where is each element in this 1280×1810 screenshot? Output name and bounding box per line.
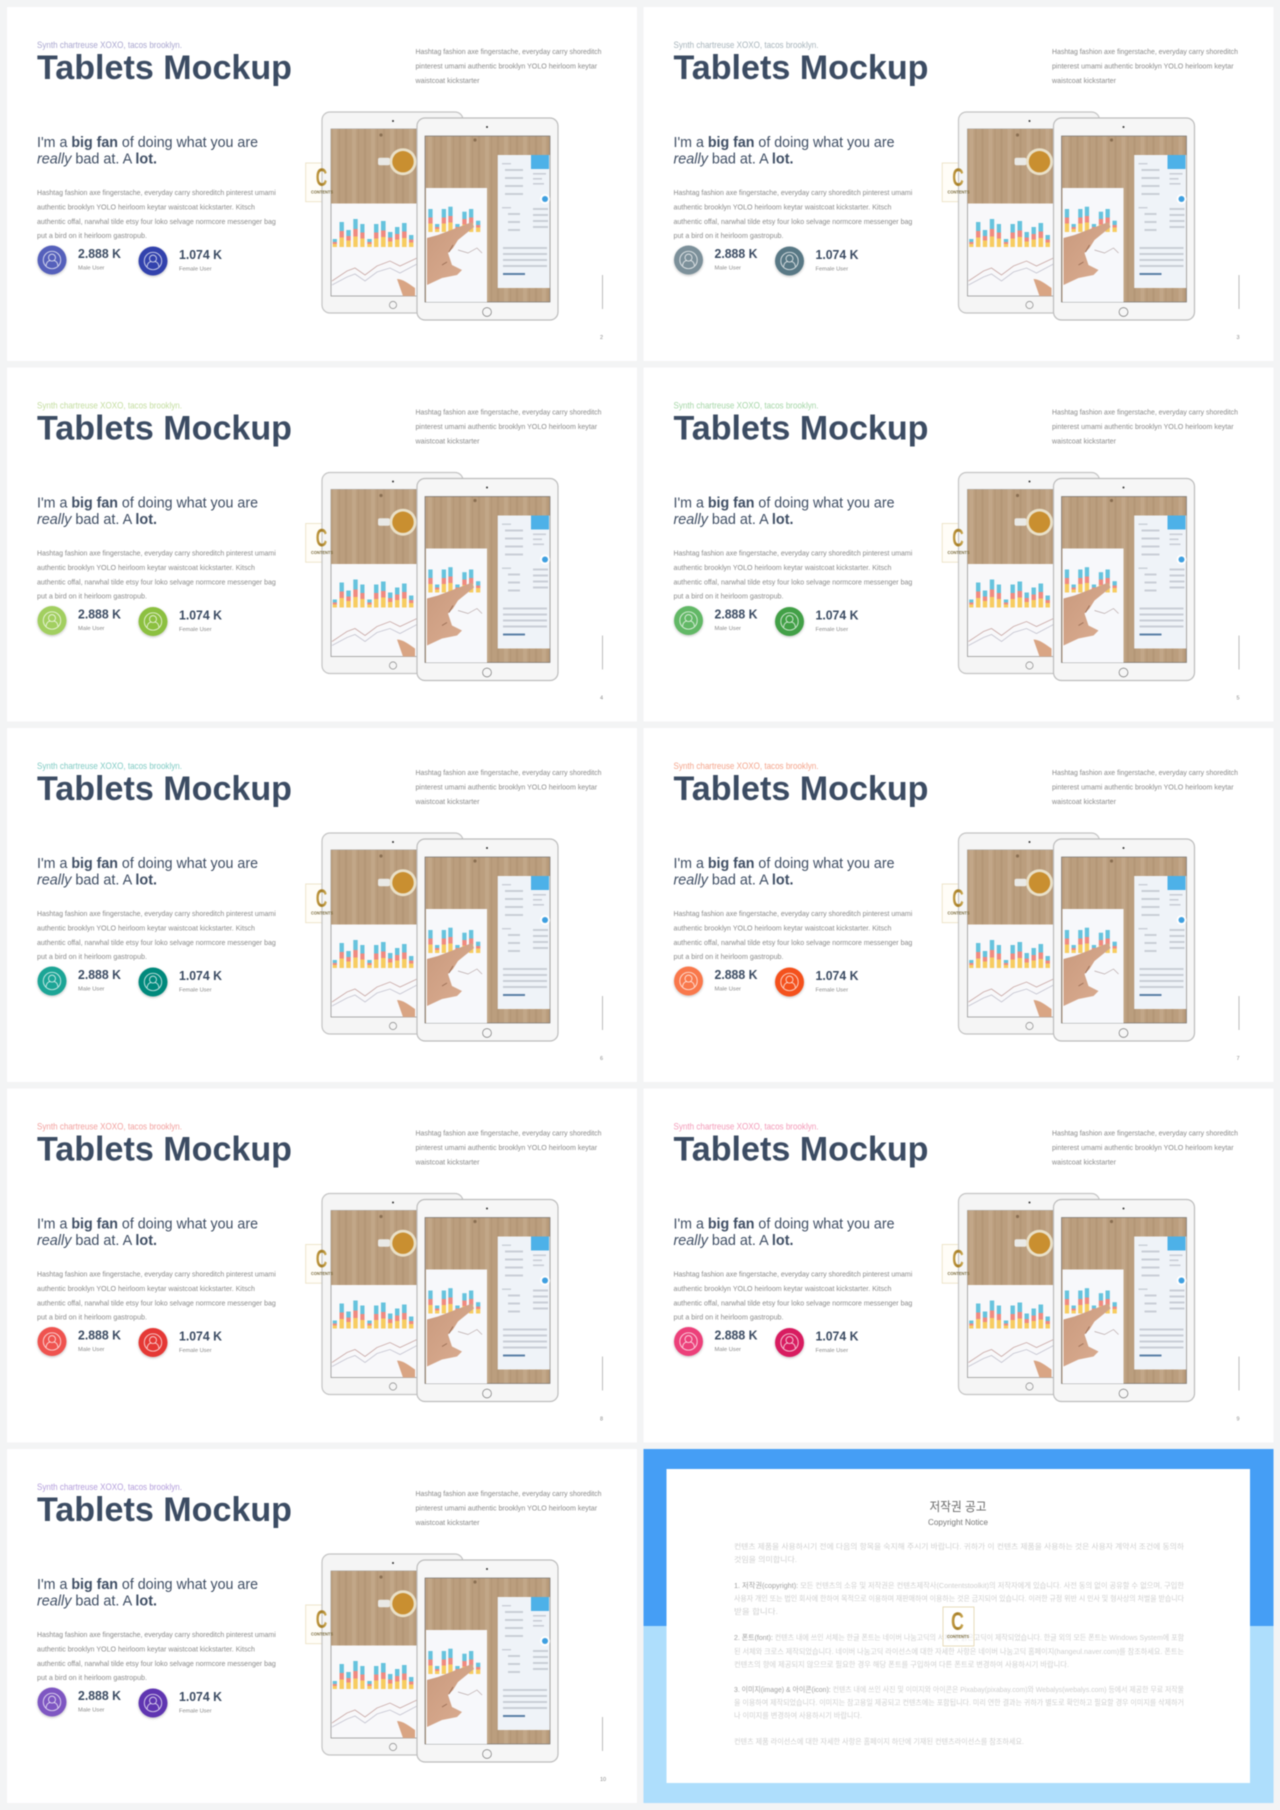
body text: authentic offal, narwhal tilde etsy four loko selvage normcore messenger bag: [37, 938, 276, 947]
stat: female user: [138, 1328, 223, 1357]
tablets mockup: [322, 472, 558, 680]
description: waistcoat kickstarter: [1051, 436, 1116, 446]
body text: authentic offal, narwhal tilde etsy four loko selvage normcore messenger bag: [37, 578, 276, 586]
clause 1: [734, 1581, 1184, 1616]
body text: [674, 188, 913, 240]
heading: I'm a big fan of doing what you are: [37, 856, 258, 872]
description: waistcoat kickstarter: [415, 76, 480, 85]
tablets mockup: [958, 833, 1194, 1041]
title: Tablets Mockup: [674, 410, 928, 448]
heading: I'm a big fan of doing what you are: [37, 1216, 258, 1232]
body text: Hashtag fashion axe fingerstache, everyday carry shoreditch pinterest umami: [37, 909, 276, 918]
heading: [674, 1216, 894, 1249]
description: waistcoat kickstarter: [415, 797, 480, 806]
description: Hashtag fashion axe fingerstache, everyday carry shoreditch: [416, 1128, 602, 1138]
watermark logo: C: [952, 1246, 964, 1274]
watermark logo: CONTENTS: [311, 910, 334, 916]
stat: male user: [674, 246, 758, 274]
stat: male user: Male User: [714, 626, 741, 632]
subtitle: Synth chartreuse XOXO, tacos brooklyn.: [37, 1122, 182, 1132]
watermark logo: C: [316, 1246, 327, 1274]
description: Hashtag fashion axe fingerstache, everyday carry shoreditch: [1052, 1128, 1238, 1138]
body text: authentic offal, narwhal tilde etsy four loko selvage normcore messenger bag: [674, 217, 912, 226]
clause 3: 나 이미지를 변경하여 사용하시기 바랍니다.: [734, 1711, 862, 1720]
clause 3: [734, 1685, 1184, 1720]
body text: [37, 1270, 276, 1322]
description: waistcoat kickstarter: [415, 436, 480, 446]
subtitle: Synth chartreuse XOXO, tacos brooklyn.: [674, 1122, 818, 1132]
description: [415, 1128, 602, 1166]
subtitle: Synth chartreuse XOXO, tacos brooklyn.: [674, 400, 818, 412]
body text: authentic offal, narwhal tilde etsy four loko selvage normcore messenger bag: [37, 1298, 276, 1308]
heading: I'm a big fan of doing what you are: [37, 135, 258, 151]
title: Tablets Mockup: [37, 770, 292, 808]
stat: male user: Male User: [78, 1708, 105, 1714]
watermark frame: [306, 524, 336, 562]
body text: Hashtag fashion axe fingerstache, everyday carry shoreditch pinterest umami: [37, 548, 276, 558]
description: waistcoat kickstarter: [415, 1158, 480, 1166]
description: pinterest umami authentic brooklyn YOLO heirloom keytar: [1052, 1143, 1234, 1152]
description: [415, 47, 602, 85]
copyright intro: [734, 1542, 1184, 1564]
watermark frame: [942, 524, 972, 562]
heading: [37, 1216, 258, 1249]
stat: female user: Female User: [179, 627, 212, 633]
clause 3: 3. 이미지(image) & 아이콘(icon): 컨텐츠 내에 쓰인 사진 및 이미지와 아이콘은 Pixabay(pixabay.com)와 Webalys(webalys.com) 등에서 제공한 무료 저작물: [734, 1685, 1184, 1694]
page number: 8: [600, 1416, 603, 1422]
accent line: [602, 1717, 603, 1751]
stat: female user: Female User: [816, 1348, 848, 1354]
body text: Hashtag fashion axe fingerstache, everyday carry shoreditch pinterest umami: [674, 1270, 913, 1278]
description: [415, 408, 602, 446]
heading: [37, 1577, 258, 1610]
stat: male user: 2.888 K: [714, 606, 758, 622]
description: waistcoat kickstarter: [415, 1518, 480, 1527]
watermark frame: [306, 1244, 336, 1283]
heading: [37, 135, 258, 168]
title: Tablets Mockup: [674, 49, 928, 87]
slide 7: [7, 1088, 637, 1442]
description: Hashtag fashion axe fingerstache, everyday carry shoreditch: [1052, 408, 1238, 416]
stat: male user: [38, 246, 122, 274]
watermark logo: CONTENTS: [311, 550, 334, 556]
body text: authentic brooklyn YOLO heirloom keytar waistcoat kickstarter. Kitsch: [674, 1284, 892, 1293]
stat: female user: 1.074 K: [179, 247, 223, 262]
copyright intro: 것임을 의미합니다.: [734, 1555, 797, 1564]
accent line: [602, 996, 603, 1030]
stat: female user: 1.074 K: [816, 608, 859, 622]
accent line: [1238, 1356, 1240, 1390]
watermark logo: C: [316, 1606, 327, 1634]
stat: male user: 2.888 K: [714, 246, 758, 261]
description: [1051, 47, 1238, 85]
heading: I'm a big fan of doing what you are: [674, 856, 894, 872]
heading: [37, 496, 258, 528]
body text: put a bird on it heirloom gastropub.: [37, 231, 147, 240]
stat: female user: Female User: [816, 266, 848, 272]
description: pinterest umami authentic brooklyn YOLO heirloom keytar: [1052, 422, 1234, 431]
body text: Hashtag fashion axe fingerstache, everyday carry shoreditch pinterest umami: [37, 1630, 276, 1639]
body text: put a bird on it heirloom gastropub.: [674, 592, 784, 600]
clause 2: 2. 폰트(font): 컨텐츠 내에 쓰인 서체는 한글 폰트는 네이버 나눔고딕의 서체 및 맑은고딕이 제작되었습니다. 한글 외의 모든 폰트는 Windows System에 포함: [734, 1633, 1184, 1642]
description: pinterest umami authentic brooklyn YOLO heirloom keytar: [416, 1143, 598, 1152]
clause 2: 컨텐츠의 향에 제공되지 않으므로 필요한 경우 해당 폰트를 구입하여 다른 폰트로 변경하여 사용하시기 바랍니다.: [734, 1660, 1069, 1669]
watermark logo: C: [952, 524, 964, 552]
heading: I'm a big fan of doing what you are: [37, 1577, 258, 1593]
clause 1: 사용자 개인 또는 법인 회사에 한하여 목적으로 이용하며 재판매하여 이용하는 것은 금지되어 있습니다. 이러한 규정 위반 시 민사 및 형사상의 처벌을 받습니다: [734, 1594, 1184, 1603]
clause 2: [734, 1633, 1184, 1669]
title: Tablets Mockup: [674, 1130, 928, 1168]
clause 1: 받을 합니다.: [734, 1607, 778, 1616]
body text: authentic brooklyn YOLO heirloom keytar waistcoat kickstarter. Kitsch: [37, 924, 255, 932]
heading: really bad at. A lot.: [674, 1233, 794, 1249]
heading: [674, 135, 894, 168]
stat: female user: [775, 968, 859, 996]
subtitle: Synth chartreuse XOXO, tacos brooklyn.: [37, 40, 182, 51]
watermark logo: C: [316, 524, 327, 552]
stat: male user: Male User: [714, 1347, 741, 1353]
body text: put a bird on it heirloom gastropub.: [674, 231, 784, 240]
watermark logo: C: [952, 885, 964, 913]
description: Hashtag fashion axe fingerstache, everyday carry shoreditch: [416, 768, 602, 777]
slide 1: [7, 7, 637, 361]
description: [1051, 768, 1238, 806]
heading: [674, 856, 894, 888]
stat: female user: Female User: [179, 266, 212, 272]
watermark logo: CONTENTS: [948, 550, 970, 556]
watermark: [943, 1607, 974, 1646]
heading: [37, 856, 258, 888]
stat: male user: 2.888 K: [78, 606, 122, 622]
body text: authentic offal, narwhal tilde etsy four loko selvage normcore messenger bag: [37, 217, 276, 226]
description: Hashtag fashion axe fingerstache, everyday carry shoreditch: [416, 408, 602, 416]
slide 5: [7, 728, 637, 1082]
body text: put a bird on it heirloom gastropub.: [674, 1312, 784, 1322]
stat: female user: [138, 1688, 223, 1718]
stat: female user: 1.074 K: [179, 1689, 223, 1704]
tablets mockup: [322, 112, 558, 320]
description: waistcoat kickstarter: [1051, 1158, 1116, 1166]
stat: female user: [138, 968, 223, 996]
description: waistcoat kickstarter: [1051, 797, 1116, 806]
description: [1051, 1128, 1238, 1166]
description: pinterest umami authentic brooklyn YOLO heirloom keytar: [416, 782, 598, 792]
body text: authentic offal, narwhal tilde etsy four loko selvage normcore messenger bag: [37, 1659, 276, 1668]
heading: [674, 496, 894, 528]
body text: [674, 548, 913, 600]
heading: really bad at. A lot.: [37, 1233, 157, 1249]
tablets mockup: [958, 112, 1194, 320]
watermark logo: C: [952, 164, 964, 192]
stat: female user: 1.074 K: [179, 608, 223, 622]
stat: female user: [775, 607, 859, 636]
watermark frame: [306, 884, 336, 923]
stat: male user: 2.888 K: [714, 967, 758, 982]
body text: put a bird on it heirloom gastropub.: [37, 1673, 147, 1682]
body text: authentic brooklyn YOLO heirloom keytar waistcoat kickstarter. Kitsch: [674, 202, 892, 212]
heading: I'm a big fan of doing what you are: [37, 496, 258, 512]
watermark logo: CONTENTS: [311, 1271, 334, 1277]
description: Hashtag fashion axe fingerstache, everyday carry shoreditch: [416, 47, 602, 56]
watermark logo: CONTENTS: [948, 190, 970, 196]
heading: I'm a big fan of doing what you are: [674, 1216, 894, 1232]
tablets mockup: [322, 833, 558, 1041]
tablets mockup: [322, 1554, 558, 1762]
title: Tablets Mockup: [37, 1491, 292, 1529]
body text: Hashtag fashion axe fingerstache, everyday carry shoreditch pinterest umami: [37, 1270, 276, 1278]
body text: authentic brooklyn YOLO heirloom keytar waistcoat kickstarter. Kitsch: [674, 924, 892, 932]
page number: 3: [1236, 335, 1240, 341]
body text: [37, 548, 276, 600]
body text: [37, 188, 276, 240]
description: pinterest umami authentic brooklyn YOLO heirloom keytar: [416, 422, 598, 431]
panel: copyright notice: [644, 1449, 1274, 1803]
body text: authentic offal, narwhal tilde etsy four loko selvage normcore messenger bag: [674, 938, 912, 947]
clause 1: 1. 저작권(copyright): 모든 컨텐츠의 소유 및 저작권은 컨텐츠제작사(Contentstoolkit)의 저작자에게 있습니다. 사전 동의 없이 공유할 수 없으며, 구입한: [734, 1581, 1184, 1590]
page number: 9: [1236, 1416, 1240, 1422]
body text: [674, 909, 913, 961]
watermark frame: [942, 1244, 972, 1283]
subtitle: Synth chartreuse XOXO, tacos brooklyn.: [674, 40, 818, 51]
heading: really bad at. A lot.: [674, 872, 794, 888]
tablets mockup: [958, 472, 1194, 680]
stat: male user: [674, 1327, 758, 1356]
stat: male user: Male User: [714, 266, 741, 272]
clause 3: 을 이용하여 제작되었습니다. 이미지는 참고용일 제공되고 컨텐츠에는 포함됩니다. 미리 연한 결과는 귀하가 별도로 확인하고 필요할 경우 이미지를 삭제하거: [734, 1698, 1184, 1707]
accent line: [1238, 636, 1240, 670]
watermark: C: [951, 1608, 964, 1636]
heading: I'm a big fan of doing what you are: [674, 135, 894, 151]
body text: Hashtag fashion axe fingerstache, everyday carry shoreditch pinterest umami: [37, 188, 276, 197]
body text: [37, 1630, 276, 1682]
body text: authentic offal, narwhal tilde etsy four loko selvage normcore messenger bag: [674, 578, 912, 586]
watermark logo: CONTENTS: [311, 1632, 334, 1638]
stat: female user: 1.074 K: [816, 247, 859, 262]
heading: really bad at. A lot.: [37, 872, 157, 888]
accent line: [602, 275, 603, 309]
page number: 4: [600, 696, 603, 702]
description: [1051, 408, 1238, 446]
stat: female user: 1.074 K: [179, 968, 223, 983]
body text: authentic brooklyn YOLO heirloom keytar waistcoat kickstarter. Kitsch: [37, 202, 255, 212]
description: pinterest umami authentic brooklyn YOLO heirloom keytar: [1052, 782, 1234, 792]
stat: female user: Female User: [816, 627, 848, 633]
watermark logo: CONTENTS: [948, 1271, 970, 1277]
body text: put a bird on it heirloom gastropub.: [37, 592, 147, 600]
title: Tablets Mockup: [37, 1130, 292, 1168]
stat: male user: Male User: [78, 1347, 105, 1353]
stat: male user: 2.888 K: [78, 967, 122, 982]
copyright heading: 저작권 공고: [930, 1500, 986, 1514]
tablets mockup: [958, 1194, 1194, 1402]
description: pinterest umami authentic brooklyn YOLO heirloom keytar: [1052, 62, 1234, 70]
stat: male user: Male User: [714, 986, 741, 992]
body text: put a bird on it heirloom gastropub.: [37, 1312, 147, 1322]
slide 6: [644, 728, 1274, 1082]
watermark frame: [942, 163, 972, 202]
body text: [674, 1270, 913, 1322]
stat: male user: 2.888 K: [78, 1688, 122, 1703]
body text: put a bird on it heirloom gastropub.: [37, 952, 147, 961]
closing line: 컨텐츠 제품 라이선스에 대한 자세한 사항은 홈페이지 하단에 기재된 컨텐츠라이선스를 참조하세요.: [734, 1737, 1024, 1746]
stat: female user: [775, 1328, 859, 1357]
subtitle: Synth chartreuse XOXO, tacos brooklyn.: [37, 400, 182, 412]
subtitle: Synth chartreuse XOXO, tacos brooklyn.: [674, 761, 818, 772]
heading: really bad at. A lot.: [674, 512, 794, 528]
slide 9: [7, 1449, 637, 1803]
stat: male user: [674, 606, 758, 635]
stat: female user: [138, 246, 223, 276]
copyright subheading: Copyright Notice: [928, 1517, 988, 1527]
body text: Hashtag fashion axe fingerstache, everyday carry shoreditch pinterest umami: [674, 548, 913, 558]
stat: male user: Male User: [78, 626, 105, 632]
body text: authentic brooklyn YOLO heirloom keytar waistcoat kickstarter. Kitsch: [37, 563, 255, 572]
stat: male user: [674, 966, 758, 996]
body text: authentic brooklyn YOLO heirloom keytar waistcoat kickstarter. Kitsch: [37, 1644, 255, 1654]
accent line: [1238, 275, 1240, 309]
page number: 10: [600, 1777, 606, 1783]
watermark logo: C: [316, 164, 327, 192]
stat: male user: Male User: [78, 986, 105, 992]
copyright intro: 컨텐츠 제품을 사용하시기 전에 다음의 항목을 숙지해 주시기 바랍니다. 귀하가 이 컨텐츠 제품을 사용하는 것은 사용자 계약서 조건에 동의하: [734, 1542, 1184, 1551]
watermark frame: [306, 163, 336, 202]
title: Tablets Mockup: [37, 49, 292, 87]
body text: authentic brooklyn YOLO heirloom keytar waistcoat kickstarter. Kitsch: [37, 1284, 255, 1293]
heading: really bad at. A lot.: [37, 512, 157, 528]
stat: female user: Female User: [179, 988, 212, 994]
description: waistcoat kickstarter: [1051, 76, 1116, 85]
stat: male user: [38, 1688, 122, 1716]
clause 2: 된 서체와 크로스 제작되었습니다. 네이버 나눔고딕 라이선스에 대한 자세한 사항은 네이버 나눔고딕 홈페이지(hangeul.naver.com)를 참조하세요. 폰트는: [734, 1647, 1184, 1656]
heading: I'm a big fan of doing what you are: [674, 496, 894, 512]
body text: Hashtag fashion axe fingerstache, everyday carry shoreditch pinterest umami: [674, 188, 913, 197]
description: Hashtag fashion axe fingerstache, everyday carry shoreditch: [1052, 47, 1238, 56]
stat: female user: Female User: [179, 1708, 212, 1714]
watermark logo: C: [316, 885, 327, 913]
stat: male user: [38, 606, 122, 635]
body text: authentic brooklyn YOLO heirloom keytar waistcoat kickstarter. Kitsch: [674, 563, 892, 572]
tablets mockup: [322, 1194, 558, 1402]
stat: female user: 1.074 K: [816, 1328, 859, 1344]
page number: 5: [1236, 696, 1240, 702]
stat: male user: [38, 966, 122, 996]
body text: Hashtag fashion axe fingerstache, everyday carry shoreditch pinterest umami: [674, 909, 913, 918]
watermark: CONTENTS: [947, 1634, 970, 1640]
body text: put a bird on it heirloom gastropub.: [674, 952, 784, 961]
stat: female user: [775, 246, 859, 276]
subtitle: Synth chartreuse XOXO, tacos brooklyn.: [37, 1482, 182, 1493]
slide 4: [644, 368, 1274, 722]
description: pinterest umami authentic brooklyn YOLO heirloom keytar: [416, 62, 598, 70]
watermark frame: [306, 1605, 336, 1644]
slide 8: [644, 1088, 1274, 1442]
accent line: [602, 1356, 603, 1390]
description: Hashtag fashion axe fingerstache, everyday carry shoreditch: [416, 1489, 602, 1498]
watermark frame: [942, 884, 972, 923]
title: Tablets Mockup: [674, 770, 928, 808]
stat: male user: 2.888 K: [714, 1328, 758, 1342]
stat: female user: 1.074 K: [816, 968, 859, 983]
page number: 6: [600, 1056, 603, 1062]
page number: 2: [600, 335, 603, 341]
title: Tablets Mockup: [37, 410, 292, 448]
slide 2: [644, 7, 1274, 361]
accent line: [602, 636, 603, 670]
page number: 7: [1236, 1056, 1240, 1062]
heading: really bad at. A lot.: [674, 152, 794, 168]
description: Hashtag fashion axe fingerstache, everyday carry shoreditch: [1052, 768, 1238, 777]
subtitle: Synth chartreuse XOXO, tacos brooklyn.: [37, 761, 182, 772]
stat: male user: 2.888 K: [78, 1328, 122, 1342]
heading: really bad at. A lot.: [37, 152, 157, 168]
stat: female user: 1.074 K: [179, 1328, 223, 1344]
stat: male user: Male User: [78, 266, 105, 272]
stat: female user: Female User: [179, 1348, 212, 1354]
stat: female user: Female User: [816, 988, 848, 994]
body text: authentic offal, narwhal tilde etsy four loko selvage normcore messenger bag: [674, 1298, 912, 1308]
stat: male user: [38, 1327, 122, 1356]
body text: [37, 909, 276, 961]
description: pinterest umami authentic brooklyn YOLO heirloom keytar: [416, 1504, 598, 1512]
stat: female user: [138, 607, 223, 636]
accent line: [1238, 996, 1240, 1030]
heading: really bad at. A lot.: [37, 1594, 157, 1610]
watermark logo: CONTENTS: [311, 190, 334, 196]
slide 3: [7, 368, 637, 722]
description: [415, 1489, 602, 1527]
stat: male user: 2.888 K: [78, 246, 122, 261]
description: [415, 768, 602, 806]
watermark logo: CONTENTS: [948, 910, 970, 916]
